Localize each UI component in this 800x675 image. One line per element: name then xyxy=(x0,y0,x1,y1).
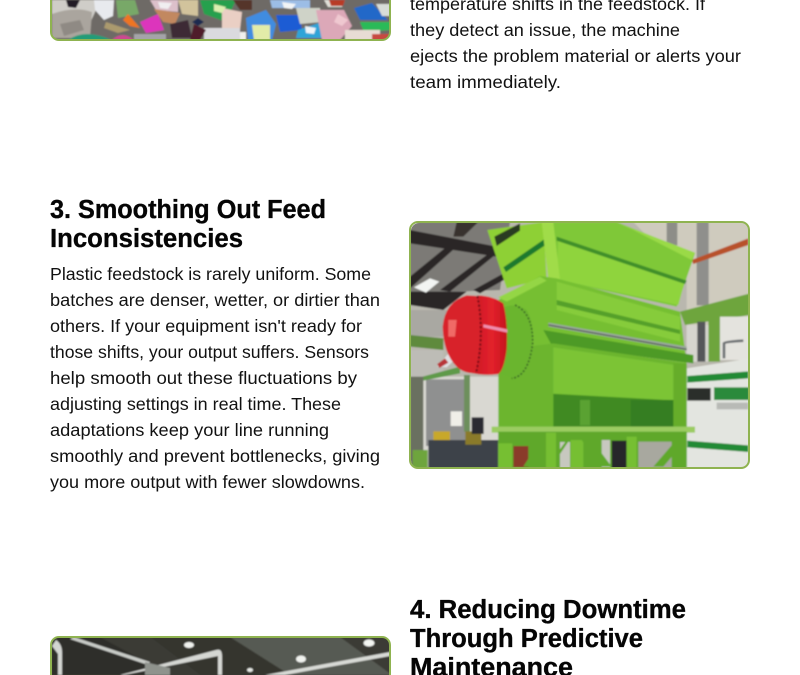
text block: section 3 paragraph: adaptations keep your line running xyxy=(50,420,329,440)
image: mixed plastic waste pile xyxy=(50,0,392,42)
text block: section 3 paragraph: Plastic feedstock is rarely uniform. Some xyxy=(50,264,371,284)
heading: section 4: Through Predictive xyxy=(410,625,643,653)
text block: section 2 closing paragraph: team immediately. xyxy=(410,72,561,92)
text block: section 3 paragraph: smoothly and prevent bottlenecks, giving xyxy=(50,446,380,466)
text block: section 3 paragraph: adjusting settings in real time. These xyxy=(50,394,341,414)
text block: section 3 paragraph: help smooth out these fluctuations by xyxy=(50,368,357,388)
text block: section 2 closing paragraph xyxy=(410,0,741,92)
heading: section 4 xyxy=(410,596,686,675)
heading: section 3 xyxy=(50,196,326,253)
heading: section 3: Inconsistencies xyxy=(50,225,243,253)
text block: section 2 closing paragraph: ejects the problem material or alerts your xyxy=(410,46,741,66)
image: factory ceiling with ducting xyxy=(50,636,392,675)
text block: section 3 paragraph: those shifts, your output suffers. Sensors xyxy=(50,342,369,362)
text block: section 3 paragraph: batches are denser, wetter, or dirtier than xyxy=(50,290,380,310)
heading: section 3: 3. Smoothing Out Feed xyxy=(50,196,326,224)
text block: section 3 paragraph: you more output with fewer slowdowns. xyxy=(50,472,365,492)
text block: section 3 paragraph xyxy=(50,264,380,492)
text block: section 3 paragraph: others. If your equipment isn't ready for xyxy=(50,316,362,336)
image: green industrial shredder xyxy=(410,222,750,469)
text block: section 2 closing paragraph: they detect an issue, the machine xyxy=(410,20,680,40)
heading: section 4: 4. Reducing Downtime xyxy=(410,596,686,624)
